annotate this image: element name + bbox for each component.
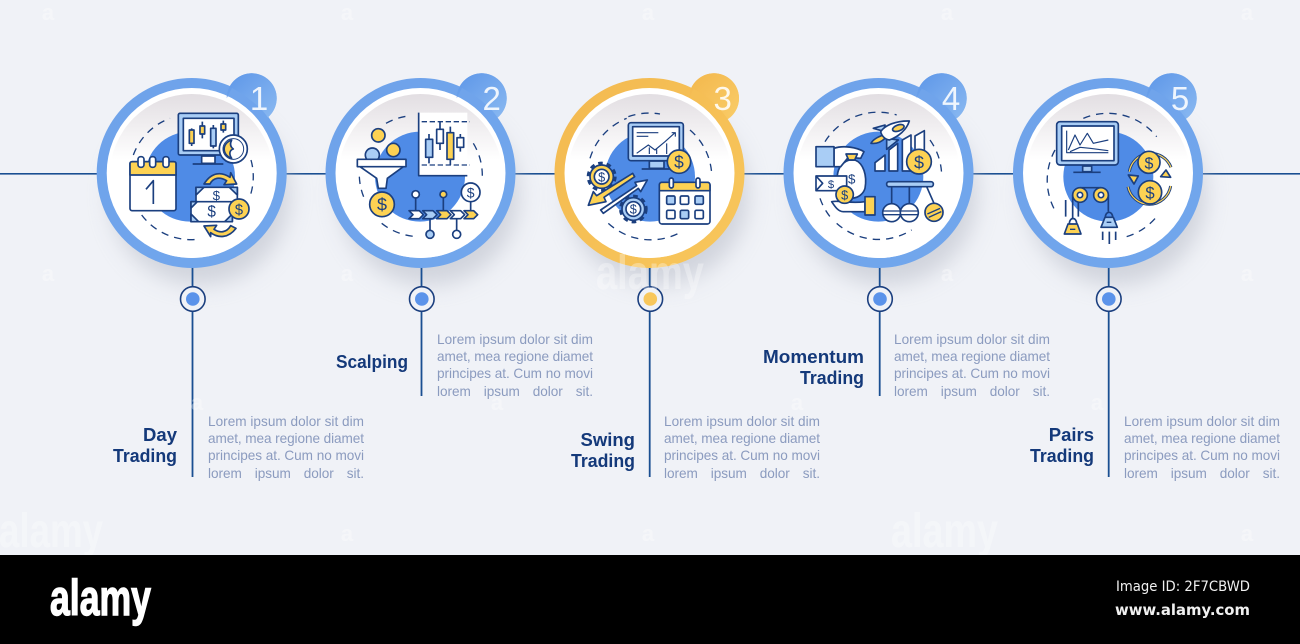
stock watermarks: a (191, 390, 204, 415)
title: momentum trading: Trading (800, 367, 864, 388)
icon: monitor, gears, calendar (588, 113, 712, 240)
number badge (689, 73, 739, 118)
number badge (457, 73, 507, 118)
title: swing trading: Trading (571, 450, 635, 471)
stock watermarks: a (341, 521, 354, 546)
icon: monitor, gears, calendar: $ (674, 152, 684, 172)
footer logo: alamy (50, 570, 151, 626)
title: scalping: Scalping (336, 351, 408, 372)
stock watermarks: a (42, 261, 55, 286)
ring (326, 73, 516, 268)
body text: Lorem ipsum dolor sit dim (1124, 414, 1280, 429)
title: pairs trading: Pairs (1049, 424, 1094, 445)
title: momentum trading (763, 346, 864, 388)
stock watermarks: a (1241, 261, 1254, 286)
body text: lorem ipsum dolor sit. (1124, 466, 1280, 481)
connector with marker (638, 266, 663, 477)
body text (664, 414, 820, 481)
body text: principes at. Cum no movi (664, 448, 820, 463)
website: www.alamy.com (1115, 601, 1250, 619)
number badge: 5 (1171, 80, 1189, 117)
number badge: 1 (250, 80, 268, 117)
title: pairs trading: Trading (1030, 445, 1094, 466)
stock watermarks: alamy (596, 247, 704, 300)
stock watermarks: alamy (891, 505, 998, 558)
icon: calendar, chart, money: $ (213, 188, 221, 203)
icon: monitor, pulleys, coins: $ (1145, 184, 1155, 203)
icon: funnel, candlesticks, timeline (357, 113, 482, 238)
number badge: 3 (714, 80, 732, 117)
body text (1124, 414, 1280, 481)
icon: funnel, candlesticks, timeline: $ (377, 195, 387, 215)
number badge (917, 73, 967, 118)
ring (784, 73, 974, 268)
body text: amet, mea regione diamet (1124, 431, 1280, 446)
panel: swing trading (554, 73, 820, 481)
panel: day trading (97, 73, 364, 481)
panel: scalping (326, 73, 593, 399)
stock watermarks: a (341, 0, 354, 25)
icon: calendar, chart, money (130, 113, 253, 240)
icon: rocket, money bag, pendulum: $ (914, 152, 924, 172)
ring (554, 73, 744, 268)
stock watermarks: a (791, 390, 804, 415)
body text: amet, mea regione diamet (208, 431, 364, 446)
icon: calendar, chart, money: $ (235, 202, 243, 218)
ring (97, 73, 287, 268)
connector with marker (410, 266, 434, 396)
body text (894, 332, 1050, 399)
image id: Image ID: 2F7CBWD (1116, 579, 1250, 595)
body text: Lorem ipsum dolor sit dim (894, 332, 1050, 347)
title: pairs trading (1030, 424, 1094, 466)
footer bar (0, 555, 1300, 644)
connector with marker (1096, 266, 1121, 477)
stock watermarks: a (642, 0, 655, 25)
stock watermarks: a (642, 521, 655, 546)
number badge: 4 (942, 80, 960, 117)
horizontal timeline line (0, 173, 1300, 175)
icon: monitor, gears, calendar: $ (630, 203, 637, 217)
stock watermarks: a (1241, 0, 1254, 25)
icon: funnel, candlesticks, timeline: $ (467, 184, 475, 200)
body text: Lorem ipsum dolor sit dim (437, 332, 593, 347)
body text: principes at. Cum no movi (894, 366, 1050, 381)
body text: Lorem ipsum dolor sit dim (208, 414, 364, 429)
body text: lorem ipsum dolor sit. (664, 466, 820, 481)
number badge: 2 (483, 80, 501, 117)
body text: principes at. Cum no movi (208, 448, 364, 463)
title: day trading (113, 424, 178, 466)
title: momentum trading: Momentum (763, 346, 864, 367)
title: day trading: Day (143, 424, 178, 445)
body text: principes at. Cum no movi (437, 366, 593, 381)
body text: amet, mea regione diamet (894, 349, 1050, 364)
number badge (1147, 73, 1197, 118)
stock watermarks: a (941, 261, 954, 286)
body text: amet, mea regione diamet (437, 349, 593, 364)
stock watermarks: a (42, 0, 55, 25)
stock watermarks: a (941, 0, 954, 25)
title: swing trading (571, 429, 635, 471)
title: swing trading: Swing (581, 429, 635, 450)
connector with marker (868, 266, 892, 396)
icon: calendar, chart, money: $ (207, 204, 216, 221)
body text: lorem ipsum dolor sit. (208, 466, 364, 481)
title: day trading: Trading (113, 445, 177, 466)
body text: lorem ipsum dolor sit. (437, 384, 593, 399)
panel: momentum trading (763, 73, 1050, 399)
stock watermarks: a (1091, 390, 1104, 415)
icon: rocket, money bag, pendulum: $ (828, 179, 835, 191)
body text: amet, mea regione diamet (664, 431, 820, 446)
icon: rocket, money bag, pendulum: $ (848, 171, 856, 186)
stock watermarks: alamy (0, 505, 103, 558)
stock watermarks: a (341, 261, 354, 286)
body text (437, 332, 593, 399)
ring (1013, 73, 1203, 268)
icon: rocket, money bag, pendulum: $ (841, 188, 848, 202)
stock watermarks: a (491, 390, 504, 415)
body text: principes at. Cum no movi (1124, 448, 1280, 463)
icon: monitor, pulleys, coins (1047, 113, 1171, 244)
icon: monitor, gears, calendar: $ (598, 170, 605, 184)
stock watermarks: a (1241, 521, 1254, 546)
body text: Lorem ipsum dolor sit dim (664, 414, 820, 429)
number badge (227, 73, 277, 118)
connector with marker (180, 266, 205, 477)
drop shadows (110, 105, 1206, 285)
panel: pairs trading (1013, 73, 1280, 481)
body text (208, 414, 364, 481)
icon: monitor, pulleys, coins: $ (1145, 155, 1154, 172)
icon: rocket, money bag, pendulum (816, 112, 943, 239)
body text: lorem ipsum dolor sit. (894, 384, 1050, 399)
